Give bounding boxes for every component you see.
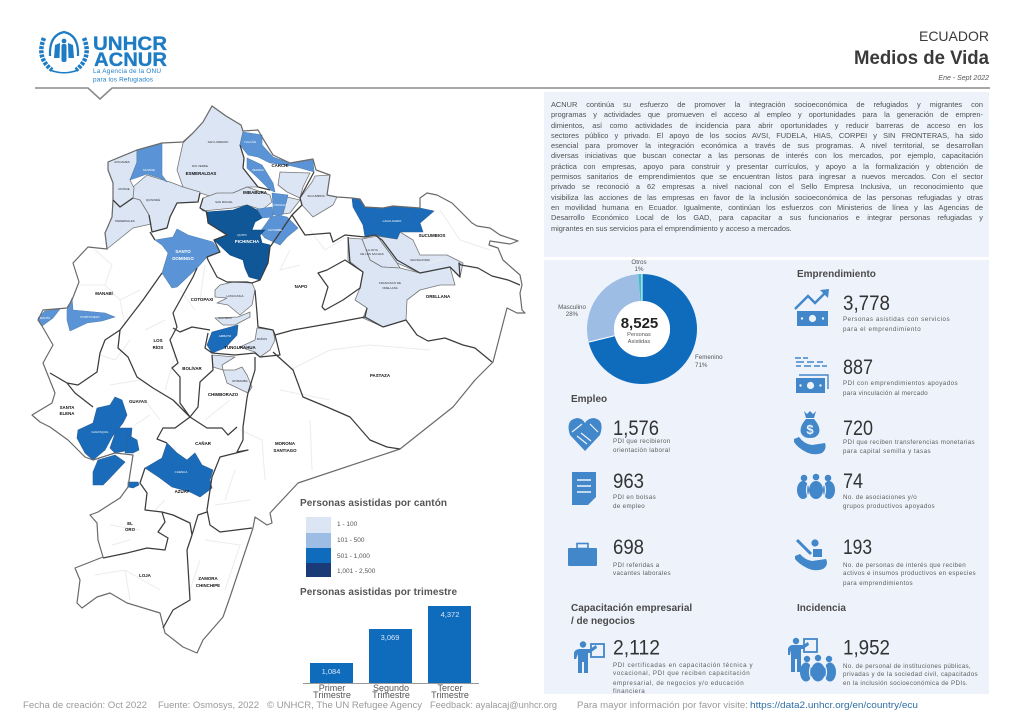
map labels: LATACUNGA [226, 294, 244, 298]
stat: 1,952: en la inclusión socioeconómica de PDIs. [843, 680, 968, 687]
map labels: IBARRA [252, 168, 264, 172]
footer [23, 700, 918, 710]
map labels: SUCUMBIOS [419, 233, 445, 238]
donut chart: gender split: Masculino [558, 304, 586, 311]
map labels: QUITO [237, 233, 247, 237]
stat: 720: $ [806, 422, 814, 437]
stat: 887 [795, 356, 958, 397]
stat: 1,576: PDI que recibieron [613, 438, 671, 445]
bar chart: persons per quarter: Primer [319, 683, 345, 693]
bar chart: persons per quarter: Tercer [437, 683, 463, 693]
footer: Feedback: ayalacaj@unhcr.org [430, 700, 557, 710]
heading: Capacitación empresarial [571, 603, 692, 627]
map labels: CHINCHIPE [196, 583, 220, 588]
map labels: LAGO AGRIO [383, 219, 402, 223]
heading: Capacitación empresarial: / de negocios [571, 616, 635, 627]
narrative text block [551, 100, 983, 233]
stat: 720: para capital semilla y tasas [843, 448, 931, 455]
stat: 1,576 [569, 417, 671, 454]
legend: persons per canton: 101 - 500 [337, 537, 365, 544]
map labels: SANTIAGO [273, 448, 297, 453]
stat: 1,952: privadas y de la sociedad civil, capacitados [843, 671, 978, 678]
map labels: BOLÍVAR [182, 366, 203, 371]
stat: 698 [568, 536, 671, 577]
panel: narrative background [544, 92, 989, 257]
stat: 3,778: para el emprendimiento [843, 326, 921, 333]
narrative text block: programas y actividades que promueven el acceso al empleo y oportunidades para la generación de empren- [551, 110, 983, 119]
stat: 3,778: 3,778 [843, 292, 890, 315]
stat: 963: de empleo [613, 503, 645, 510]
footer: Fuente: Osmosys, 2022 [158, 700, 259, 710]
title block: Medios de Vida [854, 48, 989, 69]
province boundaries [50, 145, 520, 628]
map labels: ZAMORA [198, 576, 218, 581]
stat: 887: PDI con emprendimientos apoyados [843, 380, 958, 387]
heading: Capacitación empresarial: Capacitación empresarial [571, 603, 692, 614]
stat: 698: vacantes laborales [613, 570, 671, 577]
bar chart: persons per quarter: 3,069 [381, 633, 399, 642]
narrative text block: permisos sanitarios de emprendimientos que se encuentran listos para ingresar a nuevos mercados. Con el sector [551, 172, 983, 181]
narrative text block: migrantes en sus servicios para el emprendimiento y acceso a mercados. [551, 224, 792, 233]
map labels: SALCEDO [218, 316, 233, 320]
map labels: CHIMBORAZO [208, 392, 239, 397]
canton fill: 1,001-2,500 Quito [206, 205, 270, 280]
map labels: PICHINCHA [235, 239, 260, 244]
map labels: GUAYAQUIL [91, 430, 109, 434]
stat: 887: 887 [843, 356, 873, 379]
map labels [40, 140, 451, 588]
legend: persons per canton: 1,001 - 2,500 [337, 568, 376, 575]
map labels: LOS [153, 338, 163, 343]
map labels: GUAYAS [129, 399, 147, 404]
map labels: SAN LORENZO [208, 140, 229, 144]
map labels: ELENA [60, 411, 75, 416]
logo: UNHCR ACNUR: ACNUR [94, 50, 167, 71]
map labels: COTOPAXI [191, 297, 213, 302]
map labels: ORO [125, 527, 136, 532]
map labels: DOMINGO [172, 256, 194, 261]
map labels: PEDERNALES [115, 219, 135, 223]
stat: 1,952: No. de personal de instituciones públicas, [843, 663, 971, 670]
title block: ECUADOR [919, 28, 989, 44]
map labels: ESMERALDAS [186, 171, 216, 176]
stat: 3,778: Personas asistidas con servicios [843, 316, 950, 323]
donut chart: gender split: 71% [695, 362, 708, 369]
stat: 720 [794, 411, 975, 455]
map labels: SHUSHUFINDI [410, 258, 430, 262]
bar chart: persons per quarter: Trimestre [431, 690, 469, 700]
heading: Empleo: Empleo [571, 394, 607, 405]
heading: Incidencia: Incidencia [797, 603, 846, 614]
map labels: LOJA [139, 573, 152, 578]
logo: UNHCR ACNUR: La Agencia de la ONU [93, 68, 161, 75]
header rule with pointer [35, 88, 990, 99]
map labels: QUININDÉ [146, 197, 160, 202]
map labels: MANTA [40, 316, 50, 320]
stat: 720: 720 [843, 417, 873, 440]
narrative text block: sectores público y privado. El apoyo de los socios AVSI, FUDELA, HIAS, CORPEI y SIN FRONTERAS, ha sido [551, 131, 983, 140]
narrative text block: Desarrollo Económico Local de los GAD, para capacitar a sus funcionarios e integrar personas refugiadas y [551, 213, 983, 222]
map labels: RÍOS [153, 345, 163, 350]
map of Ecuador by canton [32, 106, 525, 653]
map labels: DE LOS SACHAS [360, 252, 384, 256]
map labels: CARCHI [271, 163, 289, 168]
logo: UNHCR ACNUR: UNHCR [93, 34, 167, 55]
map labels: TULCÁN [244, 140, 256, 144]
narrative text block: dimientos, así como actividades de incidencia para abrir oportunidades y reducir barreras de acceso en los [551, 121, 983, 130]
map labels: SANTO [175, 249, 191, 254]
map labels: LA JOYA [366, 248, 378, 252]
stat: 2,112: empresarial, de negocios y/o educación [613, 680, 744, 687]
stat: 193: activos e insumos productivos en especies [843, 570, 976, 577]
map labels: SUCUMBIOS [307, 194, 325, 198]
stat: 2,112: vocacional, PDI que reciben capacitación [613, 670, 750, 677]
narrative text block: en movilidad humana en Ecuador. Igualmente, continúan los esfuerzos con Ministerios de línea y las Agencias de [551, 203, 983, 212]
heading: Emprendimiento: Emprendimiento [797, 269, 876, 280]
logo: UNHCR ACNUR: para los Refugiados [93, 76, 153, 84]
narrative text block: práctica con empresas, apoyo para construir y presentar currículos, y apoyo a la formalización y obtención de [551, 162, 983, 171]
map labels: ORELLANA [426, 294, 451, 299]
map labels: IMBABURA [243, 190, 268, 195]
map labels: MANABÍ [95, 291, 114, 296]
bar chart: persons per quarter: Personas asistidas por trimestre [300, 587, 457, 598]
map labels: ORELLANA [382, 286, 398, 290]
narrative text block: esencial para promover la integración económica a través de sus programas. A nivel territorial, se desarrollan [551, 141, 983, 150]
map labels: EL [127, 521, 133, 526]
bar chart: persons per quarter: Trimestre [372, 690, 410, 700]
title block: Ene - Sept 2022 [938, 75, 989, 82]
stat: 1,576: 1,576 [613, 417, 659, 440]
stat: 74 [797, 470, 935, 510]
map labels: RIOBAMBA [232, 379, 248, 383]
map labels: PASTAZA [370, 373, 391, 378]
donut chart: gender split: Otros [631, 259, 647, 266]
footer: Fecha de creación: Oct 2022 [23, 700, 147, 710]
footer: Para mayor información por favor visite: [577, 700, 748, 710]
stat: 698: 698 [613, 536, 644, 559]
map labels: PORTOVIEJO [80, 315, 100, 319]
bar chart: persons per quarter: Trimestre [313, 690, 351, 700]
donut chart: gender split: Asistidas [628, 339, 650, 345]
stat: 1,952: 1,952 [843, 636, 890, 660]
map labels: FRANCISCO DE [379, 281, 401, 285]
title block [854, 28, 989, 82]
stat: 2,112: PDI certificadas en capacitación técnica y [613, 662, 754, 669]
stat: 2,112: financiera [613, 688, 645, 695]
map labels: MUISNE [143, 168, 155, 172]
map labels: CAYAMBE [268, 228, 282, 232]
donut chart: gender split: Personas [627, 332, 651, 338]
donut chart: gender split: Femenino [695, 354, 723, 361]
map labels: MORONA [275, 441, 296, 446]
bar chart: persons per quarter: 4,372 [441, 610, 459, 619]
map labels: SAN MIGUEL [215, 200, 233, 204]
stat: 963 [572, 470, 656, 510]
map labels: TUNGURAHUA [224, 345, 257, 350]
donut chart: gender split: 28% [566, 311, 579, 318]
stat: 1,952 [788, 636, 978, 687]
map labels: AZUAY [175, 489, 189, 494]
stat: 720: PDI que reciben transferencias monetarias [843, 439, 975, 446]
stat: 887: para vinculación al mercado [843, 390, 928, 397]
stat: 193: No. de personas de interés que reciben [843, 562, 966, 569]
legend: persons per canton: 501 - 1,000 [337, 553, 370, 560]
map labels: ATACAMES [114, 160, 130, 164]
stat: 193: 193 [843, 536, 872, 559]
canton fills: 1-100 [105, 106, 463, 393]
donut chart: gender split: 8,525 [621, 315, 658, 332]
stat: 74: 74 [843, 470, 863, 493]
legend: persons per canton [300, 498, 447, 577]
map labels: RIO VERDE [192, 164, 208, 168]
bar chart: persons per quarter: Segundo [373, 683, 409, 693]
stat: 1,576: orientación laboral [613, 447, 670, 454]
map labels: AMBATO [219, 334, 232, 338]
logo: UNHCR ACNUR [41, 32, 167, 84]
stat: 963: PDI en bolsas [613, 494, 656, 501]
donut chart: gender split [558, 259, 723, 370]
stat: 2,112 [574, 636, 754, 695]
map labels: CAÑAR [195, 441, 212, 446]
legend: persons per canton: 1 - 100 [337, 521, 358, 528]
narrative text block: diversas iniciativas que buscan conectar a las personas de interés con los mercados, por ejemplo, capacitación [551, 151, 983, 160]
footer: https://data2.unhcr.org/en/country/ecu [750, 700, 918, 710]
map labels: MUISNE [118, 187, 130, 191]
narrative text block: visibiliza las acciones de las empresas en favor de la inclusión socioeconómica de las personas refugiadas y otras [551, 193, 983, 202]
map labels: CUENCA [175, 470, 187, 474]
panel: indicators background [544, 260, 989, 694]
narrative text block: ACNUR continúa su esfuerzo de promover la integración socioeconómica de refugiados y migrantes con [551, 100, 983, 109]
stat: 963: 963 [613, 470, 644, 493]
national outline [32, 106, 525, 653]
stat: 3,778 [795, 289, 950, 333]
stat: 2,112: 2,112 [613, 636, 660, 660]
stat: 193: para emprendimientos [843, 580, 913, 587]
stat: 74: No. de asociaciones y/o [843, 494, 917, 501]
map labels: NAPO [295, 284, 308, 289]
bar chart: persons per quarter [300, 587, 479, 700]
footer: © UNHCR, The UN Refugee Agency [267, 700, 423, 710]
map labels: OTAVALO [273, 203, 287, 207]
canton boundaries [80, 210, 490, 600]
stat: 698: PDI referidas a [613, 562, 660, 569]
canton fills: 501-1,000 [77, 198, 434, 497]
legend: persons per canton: Personas asistidas por cantón [300, 498, 447, 509]
map labels: SANTA [60, 405, 75, 410]
stat: 193 [795, 536, 976, 587]
narrative text block: privado se reconoció a 62 empresas a nivel nacional con el Sello Empresa Inclusiva, un reconocimiento que [551, 182, 983, 191]
map labels: BAÑOS [257, 336, 267, 341]
canton fills: 101-500 [38, 132, 314, 331]
donut chart: gender split: 1% [635, 266, 644, 273]
bar chart: persons per quarter: 1,084 [322, 667, 340, 676]
stat: 74: grupos productivos apoyados [843, 503, 935, 510]
